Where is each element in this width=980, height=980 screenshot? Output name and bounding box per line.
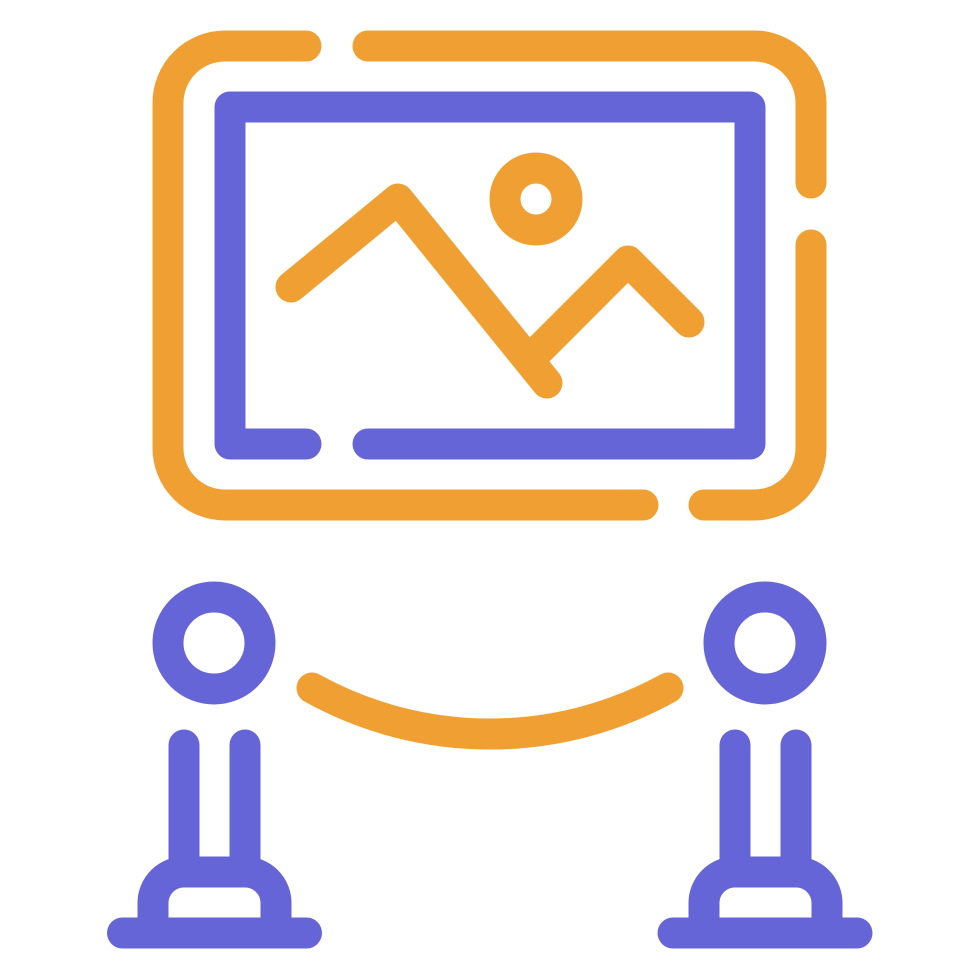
right post: [673, 745, 857, 933]
picture: sun: [505, 168, 567, 230]
inner frame: purple picture border: [230, 107, 750, 444]
picture: mountains: [291, 199, 689, 383]
outer frame: orange dashed rounded rectangle: [168, 46, 811, 505]
left post ring: [168, 597, 260, 689]
right post ring: [719, 597, 811, 689]
rope: [312, 688, 668, 734]
left post: [122, 745, 306, 933]
